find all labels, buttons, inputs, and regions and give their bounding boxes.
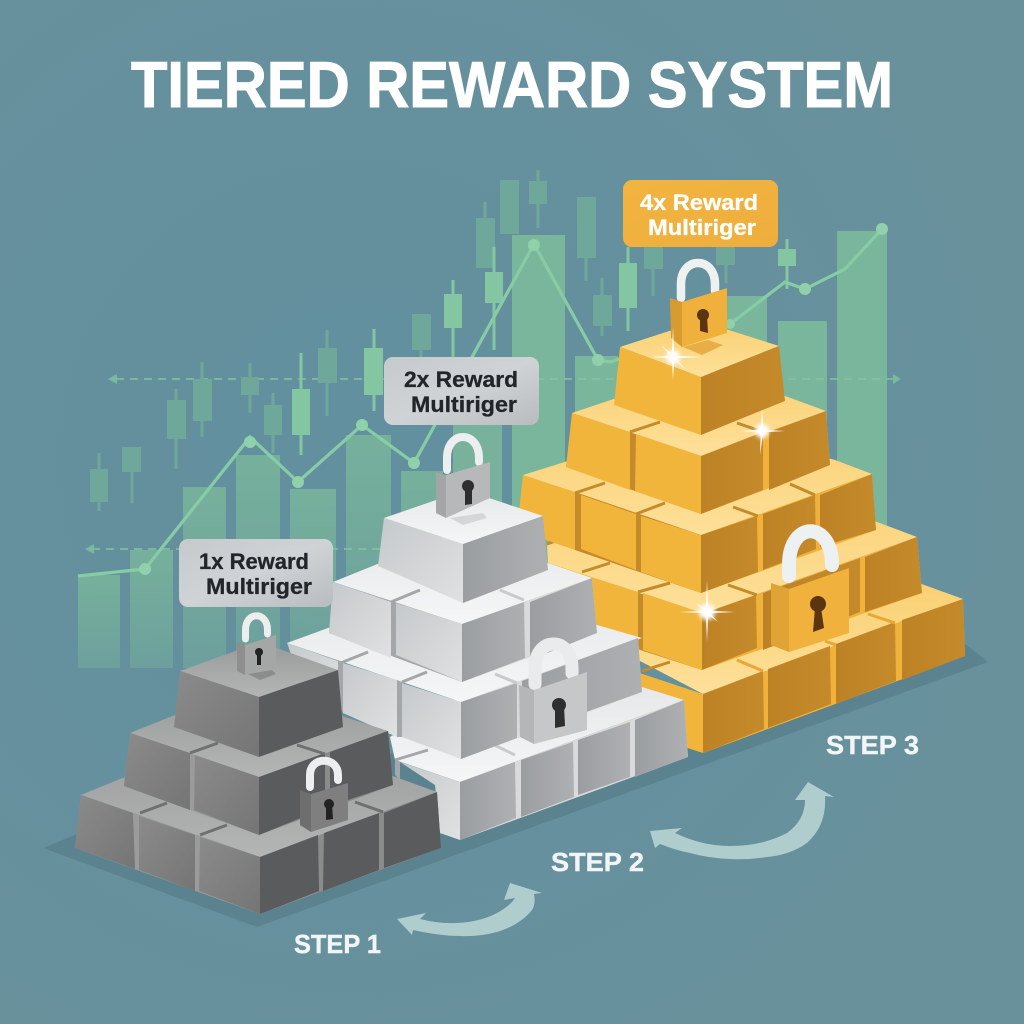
label: 1x multiplier: Multiriger bbox=[206, 574, 312, 599]
ground shadow bbox=[43, 640, 988, 927]
step label 1: STEP 1 bbox=[294, 929, 381, 959]
label: 1x multiplier: 1x Reward bbox=[199, 549, 309, 574]
label: 2x multiplier: Multiriger bbox=[411, 392, 517, 417]
icon: gold padlock, lower bbox=[771, 531, 849, 652]
trend line with markers bbox=[78, 223, 888, 576]
label: 2x multiplier: 2x Reward bbox=[404, 367, 518, 392]
icon: grey padlock, top bbox=[237, 616, 276, 675]
gold top block bbox=[614, 321, 785, 435]
label: 1x multiplier bbox=[179, 539, 333, 607]
gold third layer bbox=[517, 420, 876, 593]
gold pyramid: step 3 bbox=[517, 263, 965, 753]
silver second layer bbox=[329, 530, 597, 682]
arrow: step 2 to step 3 bbox=[650, 782, 834, 859]
icon: silver padlock, lower bbox=[519, 644, 587, 744]
gold second layer bbox=[566, 370, 830, 514]
gold bottom layer bbox=[600, 578, 965, 753]
candlesticks bbox=[90, 170, 796, 511]
silver pyramid: step 2 bbox=[287, 437, 688, 840]
silver third layer bbox=[287, 590, 642, 759]
grey bottom layer bbox=[75, 730, 441, 914]
label: 4x multiplier: Multiriger bbox=[648, 215, 756, 240]
icon: gold padlock, top bbox=[670, 263, 727, 347]
label: 2x multiplier bbox=[384, 357, 539, 425]
silver bottom layer bbox=[390, 687, 688, 840]
arrow: step 1 to step 2 bbox=[397, 883, 542, 936]
step label 3: STEP 3 bbox=[826, 730, 919, 760]
gold fourth layer bbox=[547, 470, 922, 670]
sparkle highlights bbox=[650, 327, 785, 642]
silver top block bbox=[378, 490, 548, 603]
icon: grey padlock, lower bbox=[300, 761, 348, 832]
bar chart columns bbox=[78, 231, 887, 668]
dashed guide arrows bbox=[85, 374, 901, 554]
icon: silver padlock, top bbox=[436, 437, 490, 518]
grey top block bbox=[174, 642, 343, 757]
label: 4x multiplier: 4x Reward bbox=[640, 190, 758, 215]
background chart: bars, candlesticks and trend line bbox=[78, 170, 901, 668]
title: TIERED REWARD SYSTEM bbox=[131, 49, 893, 122]
step label 2: STEP 2 bbox=[551, 847, 644, 877]
label: 4x multiplier bbox=[623, 180, 778, 247]
dark grey pyramid: step 1 bbox=[75, 616, 441, 914]
grey second layer bbox=[124, 690, 393, 835]
